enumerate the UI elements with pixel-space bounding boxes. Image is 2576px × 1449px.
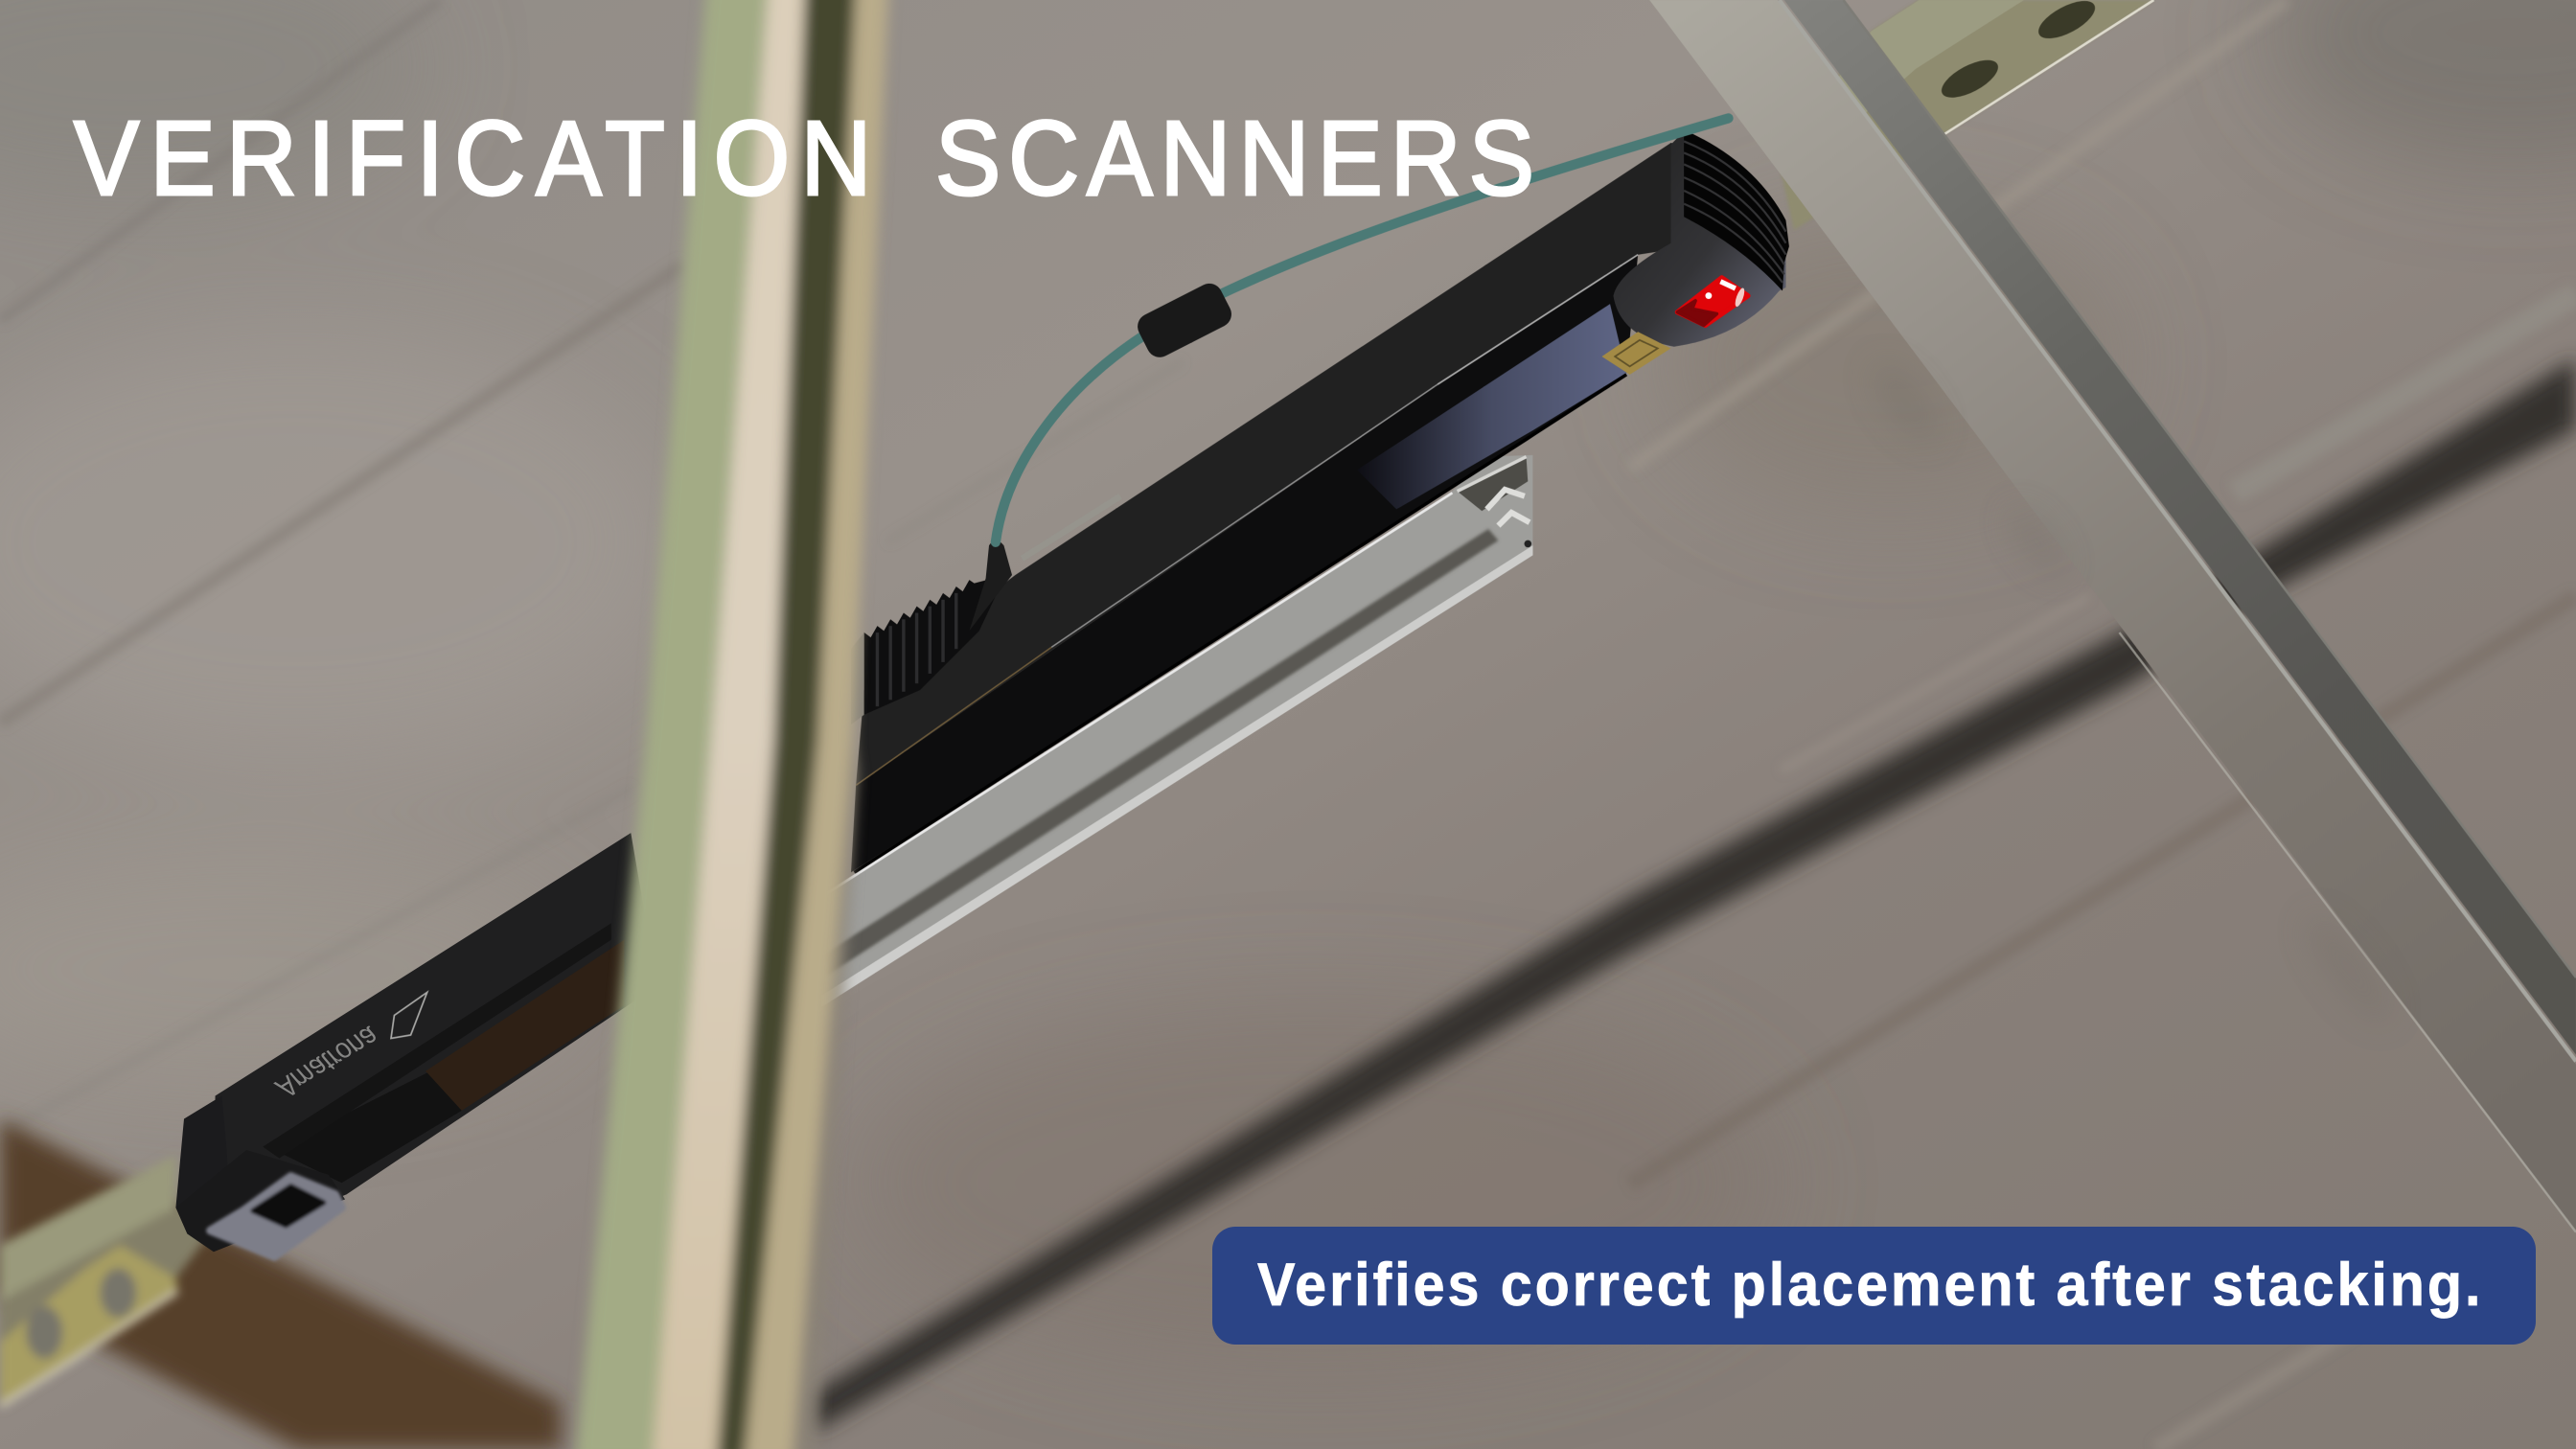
- cable connector: [969, 540, 1012, 631]
- printed brand mark: Amatrona: [269, 1020, 384, 1107]
- left mounting rail with bolts: [0, 1155, 230, 1406]
- right end head: [1601, 129, 1789, 375]
- brown wooden beam, blurred: [0, 1118, 561, 1449]
- caption banner: Verifies correct placement after stacking.: [1257, 1251, 2481, 1318]
- upper right mounting rail with slots: [1778, 0, 2153, 230]
- ferrite core: [1133, 279, 1236, 361]
- title: SCANNERS: [935, 100, 1534, 218]
- beam mottling: [1860, 352, 2404, 1034]
- main scanner body: [851, 129, 1789, 872]
- red indicator button: [1677, 278, 1748, 325]
- title: VERIFICATION: [74, 100, 871, 218]
- left cooling fins: [851, 575, 1005, 724]
- clip at scanner end: [210, 1176, 342, 1256]
- right cooling fins: [1684, 129, 1789, 290]
- green sensor cable with ferrite: [996, 118, 1728, 542]
- aluminium profile under scanner: [821, 455, 1532, 1007]
- glossy blue side face: [1357, 304, 1626, 509]
- title: [74, 100, 1534, 218]
- blurred vertical post in foreground: [575, 0, 888, 1449]
- caption banner: [1212, 1227, 2536, 1345]
- printed brand mark: [269, 992, 427, 1107]
- dark cross bar, blurred: [814, 358, 2576, 1433]
- silver diagonal beam in foreground: [1649, 0, 2576, 1232]
- scanner end cap: [175, 1095, 230, 1233]
- lower scanner section: [175, 833, 657, 1256]
- yellow warning label: [1601, 332, 1670, 375]
